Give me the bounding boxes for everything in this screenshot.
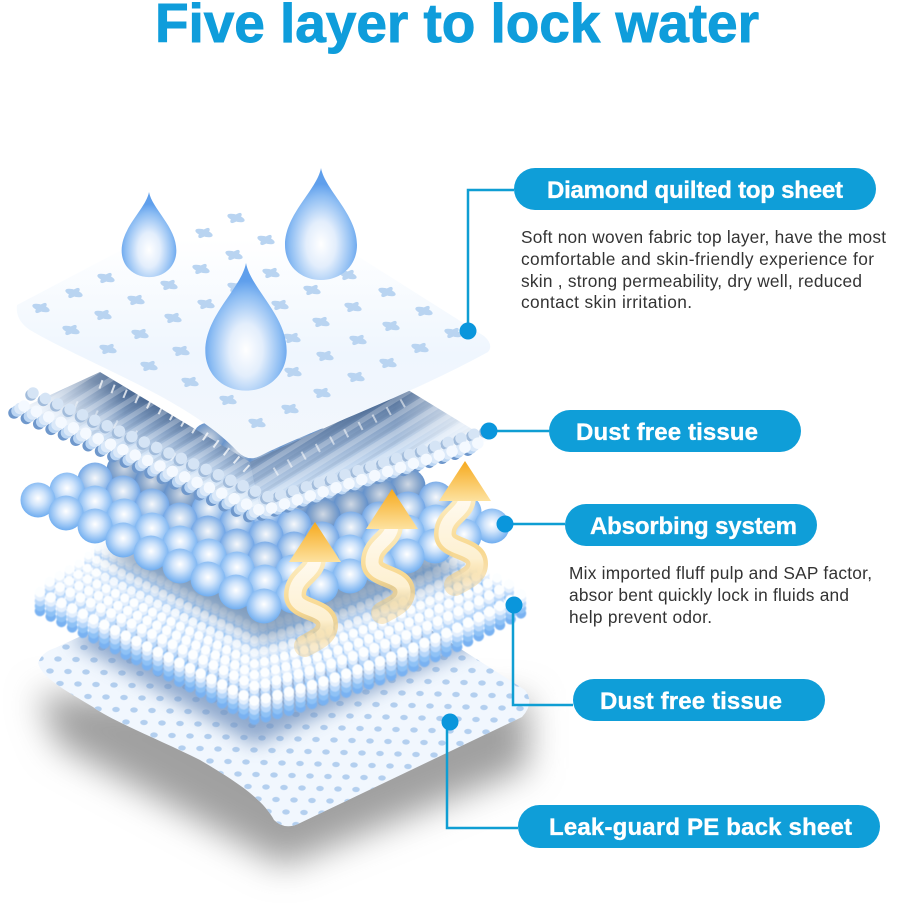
- text block: top sheet description: comfortable and skin-friendly experience for: [521, 249, 874, 269]
- label: diamond quilted top sheet: [514, 168, 876, 210]
- text block: top sheet description: contact skin irritation.: [521, 292, 692, 312]
- text block: top sheet description: skin , strong permeability, dry well, reduced: [521, 271, 862, 291]
- ground shadow: [38, 695, 528, 866]
- text block: absorbing system description: Mix imported fluff pulp and SAP factor,: [569, 563, 872, 583]
- text block: top sheet description: [521, 227, 886, 312]
- label: absorbing system: [565, 504, 817, 546]
- water drop: small left: [122, 192, 176, 277]
- arrow: rising moisture left: [289, 522, 341, 646]
- leader line: top sheet: [460, 190, 514, 340]
- text block: absorbing system description: absor bent quickly lock in fluids and: [569, 585, 849, 605]
- shadow under absorbing balls: [105, 480, 465, 640]
- text block: absorbing system description: help prevent odor.: [569, 607, 712, 627]
- arrow: rising moisture centre: [366, 489, 418, 613]
- layer 5: leak-guard back sheet: [38, 622, 530, 826]
- label: dust free tissue lower: Dust free tissue: [600, 688, 782, 715]
- text block: absorbing system description: [569, 563, 872, 627]
- label: leak-guard PE back sheet: Leak-guard PE back sheet: [549, 814, 852, 841]
- label: dust free tissue lower: [573, 679, 825, 721]
- label: diamond quilted top sheet: Diamond quilted top sheet: [547, 177, 843, 204]
- water drop: large centre: [205, 263, 287, 391]
- leader line: dust free tissue lower: [506, 596, 573, 705]
- layer 1: diamond quilted top sheet: [17, 185, 490, 458]
- leader line: dust free tissue upper: [480, 422, 549, 440]
- label: leak-guard PE back sheet: [518, 805, 880, 848]
- text block: top sheet description: Soft non woven fabric top layer, have the most: [521, 227, 886, 247]
- layer diagram illustration: [14, 168, 529, 866]
- arrow: rising moisture right: [439, 461, 491, 585]
- leader line: back sheet: [442, 714, 518, 828]
- layer 4: dust free tissue coils: [40, 505, 525, 720]
- layer 2: dust free tissue ribs: [14, 360, 497, 518]
- label: absorbing system: Absorbing system: [590, 513, 797, 540]
- leader line: absorbing system: [496, 516, 565, 532]
- quilted diamond marks: [31, 211, 463, 430]
- water drop: large right: [285, 168, 357, 280]
- label: dust free tissue upper: Dust free tissue: [576, 419, 758, 446]
- label: dust free tissue upper: [549, 410, 801, 452]
- layer 3: absorbing system balls: [20, 402, 510, 624]
